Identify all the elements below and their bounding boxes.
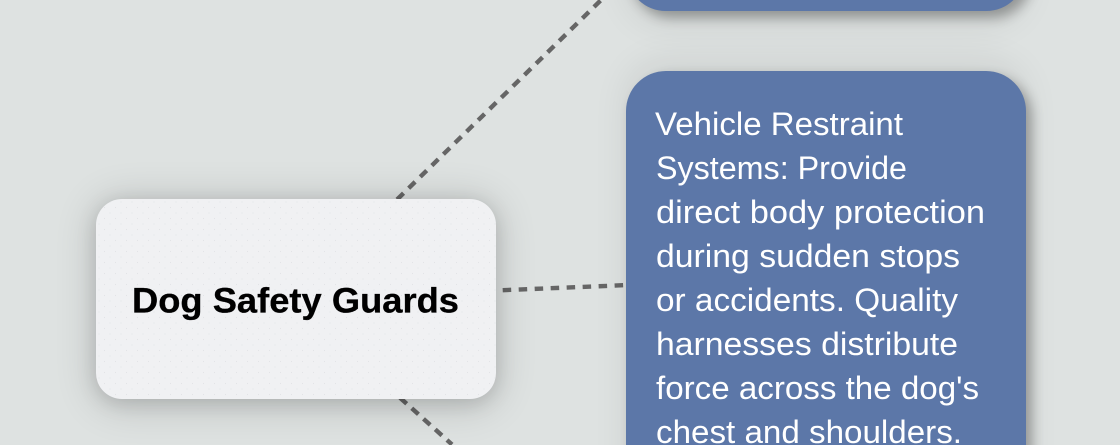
card body text: during sudden stops bbox=[656, 238, 960, 274]
card body text: Systems: Provide bbox=[656, 150, 907, 186]
card body text: direct body protection bbox=[656, 194, 985, 230]
central node: Dog Safety Guards bbox=[92, 197, 500, 409]
card body text: or accidents. Quality bbox=[656, 282, 958, 318]
card body text bbox=[655, 106, 985, 445]
top card (cropped) bbox=[626, 0, 1032, 25]
card body text: harnesses distribute bbox=[656, 326, 958, 362]
card body text: Vehicle Restraint bbox=[655, 106, 903, 142]
central node title: Dog Safety Guards bbox=[132, 282, 459, 320]
connector: center to lower card bbox=[400, 398, 452, 444]
card: vehicle restraint systems bbox=[626, 60, 1032, 445]
card body text: force across the dog's bbox=[656, 370, 979, 406]
connector: center to vehicle restraint card bbox=[503, 285, 624, 290]
connector: center to top card bbox=[397, 0, 602, 199]
